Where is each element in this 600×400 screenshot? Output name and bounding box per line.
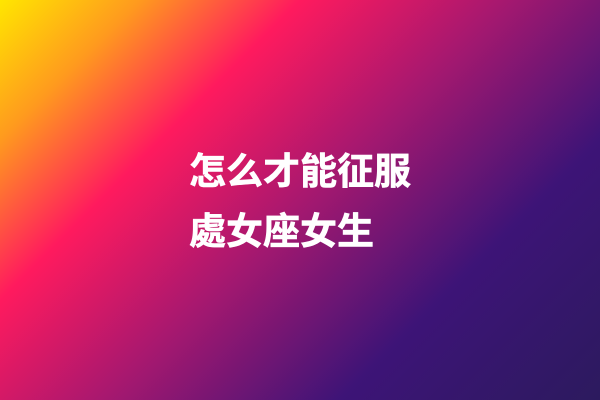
title [189, 151, 411, 252]
title: 處女座女生 [189, 211, 374, 252]
title: 怎么才能征服 [189, 151, 411, 192]
